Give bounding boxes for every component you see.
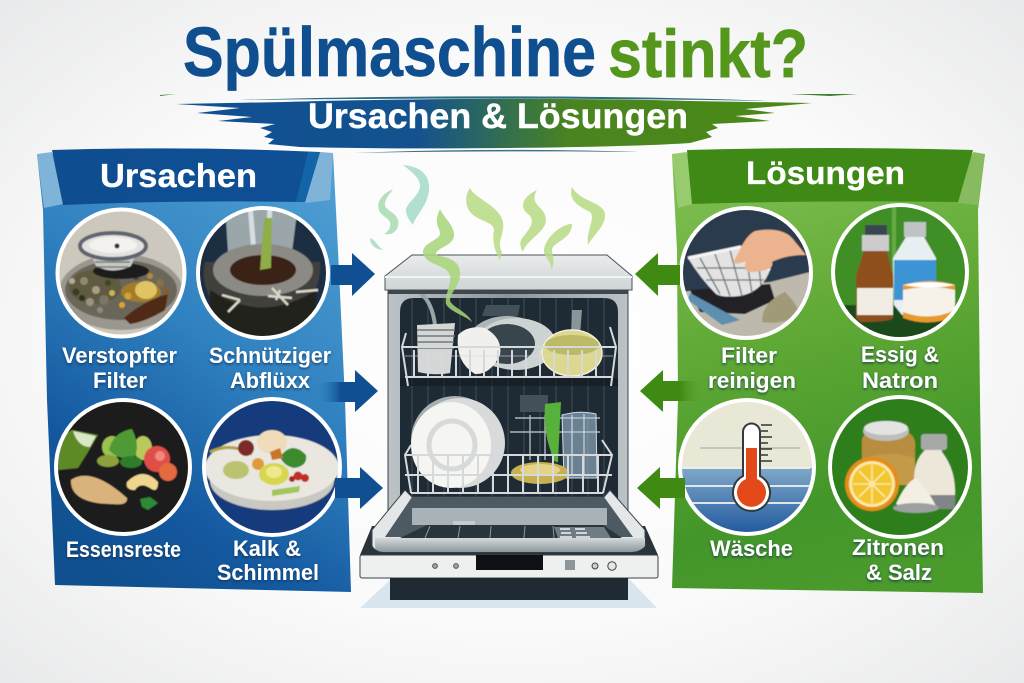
arrow: blue middle (318, 370, 378, 412)
panel background (37, 153, 351, 592)
panel: solutions (672, 148, 985, 593)
arrow: blue bottom (335, 467, 383, 509)
title: stinkt? (608, 16, 808, 92)
label: Kalk & Schimmel: Kalk & (233, 536, 301, 561)
label: Filter reinigen: Filter (721, 343, 777, 368)
label: Filter reinigen: reinigen (708, 368, 796, 393)
lower rack wire (405, 440, 612, 494)
panel: causes (37, 148, 351, 592)
interior (400, 298, 618, 512)
subtitle brush banner (160, 94, 858, 153)
label: Filter reinigen (708, 343, 796, 393)
banner: Lösungen: Lösungen (746, 155, 905, 191)
title: Spülmaschine (183, 13, 596, 91)
label: Wäsche: Wäsche (710, 536, 793, 561)
dishes: lower rack (411, 396, 600, 488)
label: Essig & Natron: Essig & (861, 342, 939, 367)
control panel (360, 555, 658, 578)
banner: Ursachen: Ursachen (100, 157, 257, 194)
arrow: green bottom (637, 467, 685, 509)
control panel backing (360, 526, 658, 555)
upper rack wire (402, 327, 616, 386)
label: Zitronen & Salz (852, 535, 944, 585)
panel background (672, 154, 985, 593)
label: Essensreste: Essensreste (66, 537, 181, 562)
label: Zitronen & Salz: Zitronen (852, 535, 944, 560)
label: Verstopfter Filter (62, 343, 177, 393)
banner: Lösungen (687, 148, 973, 204)
label: Verstopfter Filter: Filter (93, 368, 147, 393)
icon: lemon and salt (828, 395, 973, 540)
arrow: blue top (331, 253, 375, 296)
dishwasher (360, 165, 658, 608)
label: Schnütziger Abflüxx (209, 343, 331, 393)
arrow: green top (635, 253, 680, 296)
open door (372, 490, 645, 552)
icon: hot wash thermometer (675, 395, 820, 538)
steam (370, 165, 605, 322)
label: Schnütziger Abflüxx: Abflüxx (230, 368, 310, 393)
label: Kalk & Schimmel (217, 536, 319, 585)
lid (385, 255, 632, 290)
arrow: green middle (640, 370, 706, 412)
dishes: upper rack (417, 294, 602, 376)
label: Kalk & Schimmel: Schimmel (217, 560, 319, 585)
icon: vinegar and baking soda (830, 203, 970, 345)
floor shadow (360, 578, 657, 608)
banner: Ursachen (52, 148, 320, 205)
label: Essig & Natron (861, 342, 939, 393)
icon: clogged filter (56, 208, 186, 338)
label: Verstopfter Filter: Verstopfter (62, 343, 177, 368)
icon: food scraps (50, 395, 195, 540)
cabinet frame (388, 290, 628, 515)
label: Zitronen & Salz: & Salz (866, 560, 932, 585)
icon: cleaning filter (680, 206, 813, 340)
label: Schnütziger Abflüxx: Schnütziger (209, 343, 331, 368)
label: Essig & Natron: Natron (862, 368, 938, 393)
icon: limescale and mould plate (200, 395, 345, 540)
subtitle brush banner: Ursachen & Lösungen (308, 97, 688, 136)
base (390, 578, 628, 600)
icon: dirty drain (195, 205, 335, 345)
